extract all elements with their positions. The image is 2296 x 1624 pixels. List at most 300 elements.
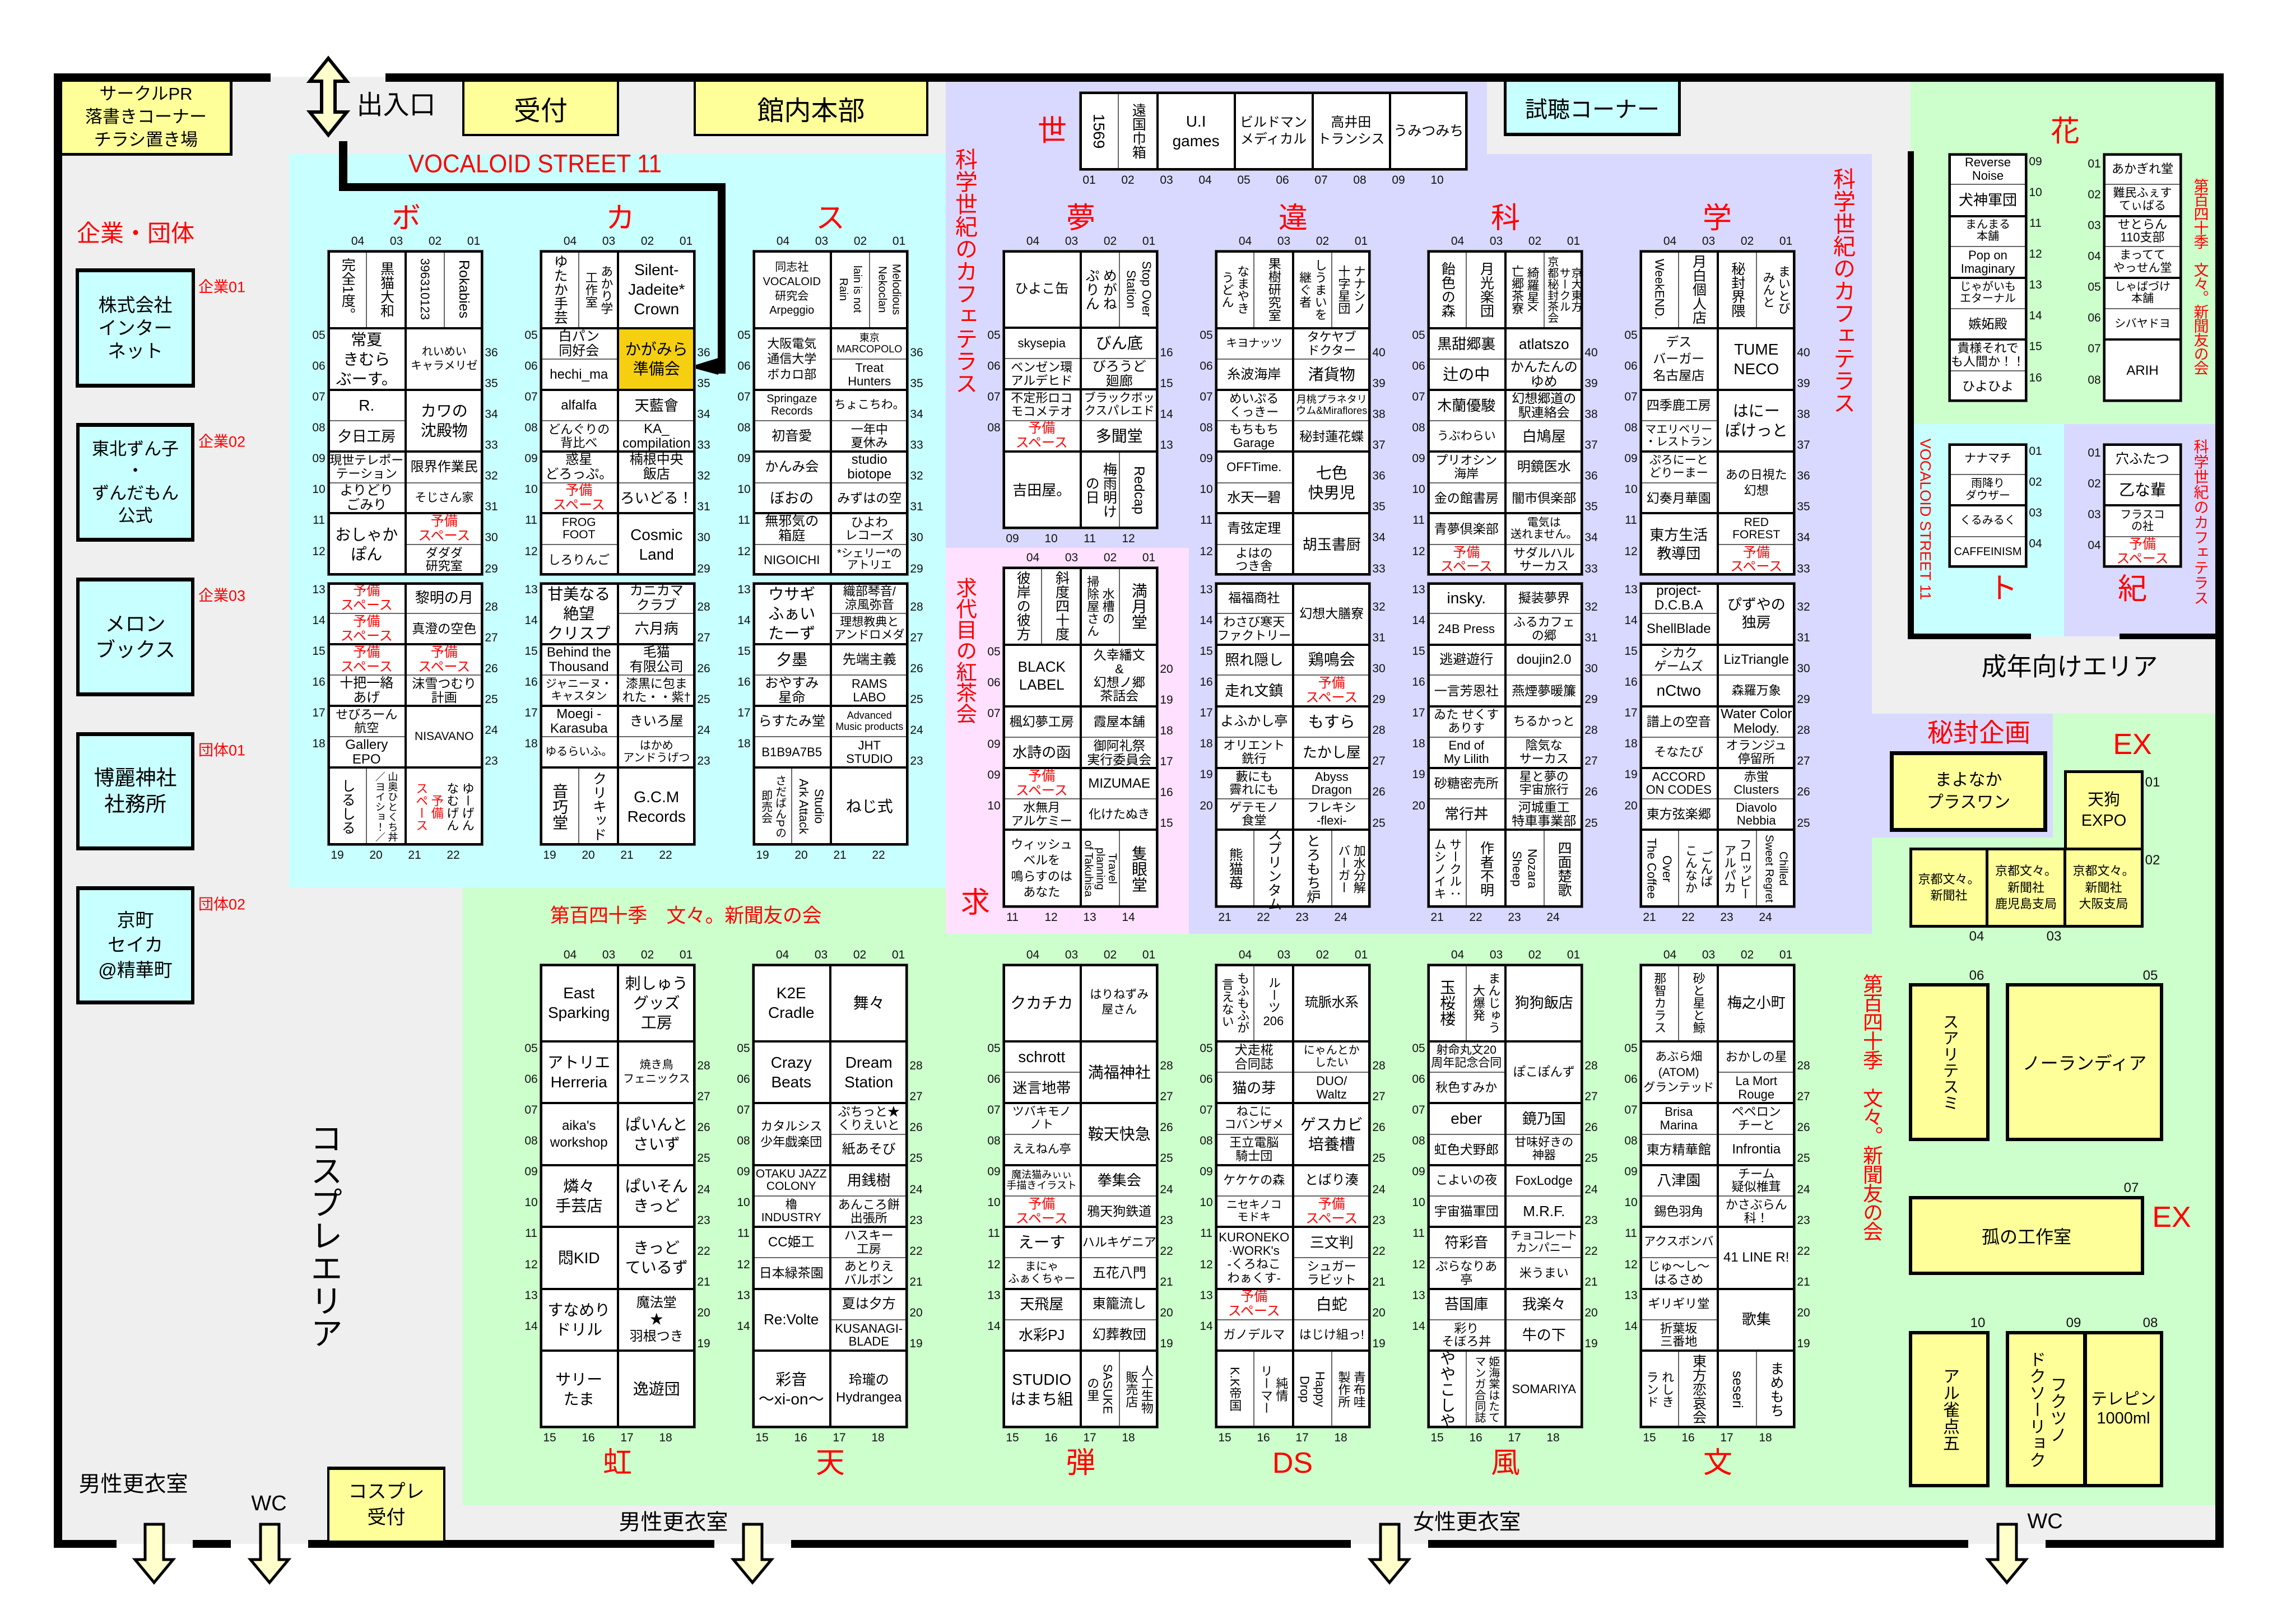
seat numbers: 15: [1643, 1431, 1656, 1444]
booth block: ボ lower: [328, 583, 483, 845]
booth block: 科 upper: サダルハル: [1513, 546, 1575, 560]
booth block: カ upper: しろりんご: [548, 553, 610, 567]
seat numbers: 26: [1797, 785, 1810, 798]
booth block: ス upper: 無邪気の: [765, 514, 819, 529]
booth block: 風: 苔国庫: [1444, 1296, 1488, 1313]
booth block: 夢: 梅雨明け: [1101, 462, 1117, 518]
booth block: 夢: の日: [1084, 476, 1099, 504]
seat numbers: 15: [2029, 340, 2042, 353]
booth block: カ lower: ジャニーヌ・: [546, 678, 612, 690]
booth block: 風: 彩り: [1454, 1321, 1479, 1336]
booth block: ス lower: 星命: [778, 690, 805, 705]
booth block: 文: じゅ〜し〜: [1648, 1259, 1709, 1273]
booth block: 夢: 不定形ロコ: [1011, 391, 1072, 405]
booth block: カ lower: クリキッド: [591, 771, 606, 841]
booth block: 夢: [1003, 250, 1158, 529]
seat numbers: 10: [524, 483, 538, 496]
seat numbers: [1197, 946, 1388, 1446]
booth block: ボ lower: 航空: [354, 720, 379, 735]
booth block: 科 upper: 電気は: [1527, 516, 1561, 529]
seat numbers: 03: [602, 235, 615, 248]
booth block: 求: 予備: [1028, 769, 1055, 784]
seat numbers: 31: [485, 500, 498, 513]
booth block: ス upper: [753, 250, 908, 575]
booth: 鹿児島支局: 鹿児島支局: [1995, 897, 2057, 911]
seat numbers: 38: [1797, 408, 1810, 421]
seat numbers: 22: [909, 1245, 923, 1258]
seat numbers: 02: [429, 235, 441, 248]
booth block: 天: [752, 964, 908, 1428]
seat numbers: 09: [1624, 452, 1638, 465]
seat numbers: 17: [1295, 1431, 1309, 1444]
booth block: ト: くるみるく: [1960, 514, 2016, 527]
seat numbers: 35: [697, 377, 710, 390]
EX booth numbers: 10: [1970, 1315, 1985, 1330]
seat numbers: 06: [987, 1073, 1001, 1086]
seat numbers: 19: [1584, 1337, 1598, 1350]
seat numbers: 03: [1702, 948, 1715, 961]
seat numbers: 16: [1624, 676, 1638, 688]
seat numbers: 03: [602, 948, 615, 961]
seat numbers: 27: [1584, 755, 1598, 767]
booth block: 文: Rouge: [1738, 1087, 1774, 1101]
zone heading: 科学世紀のカフェテラス small: 科学世紀のカフェテラス: [2192, 439, 2209, 605]
seat numbers: 06: [1412, 1073, 1425, 1086]
booth block: 科 upper: 京大東方: [1569, 267, 1582, 311]
booth block: 弾: ハルキゲニア: [1082, 1235, 1156, 1249]
booth block: 夢: skysepia: [1017, 336, 1066, 350]
booth block: 違 lower: 藪にも: [1235, 770, 1272, 784]
seat numbers: 06: [1412, 360, 1425, 373]
booth block: ボ upper: れいめい: [422, 346, 467, 358]
booth block: 違 upper: 秘封蓮花蝶: [1299, 429, 1364, 444]
booth block: カ lower: きいろ屋: [630, 714, 684, 729]
booth block: 学 lower: そなたび: [1654, 745, 1703, 759]
booth block: 風: カンパニー: [1516, 1242, 1572, 1254]
seat numbers: 14: [1160, 408, 1173, 421]
booth: 大阪支局: 京都文々。: [2072, 864, 2135, 878]
booth block: カ lower: 有限公司: [630, 659, 684, 674]
booth block: 天: バルボン: [844, 1273, 894, 1287]
seat numbers: 11: [1625, 514, 1637, 527]
booth block: 花 left: Noise: [1972, 169, 2004, 183]
seat numbers: 07: [1412, 1104, 1425, 1116]
booth: フクツノドクソーリョク: フクツノ: [2047, 1376, 2066, 1443]
seat numbers: 01: [467, 235, 480, 248]
booth block: 夢: ひよこ缶: [1015, 281, 1068, 296]
seat numbers: 30: [1797, 662, 1810, 675]
seat numbers: 17: [1160, 755, 1173, 768]
seat numbers: 20: [1584, 1306, 1598, 1319]
booth block: 科 upper: かんたんの: [1510, 360, 1578, 375]
seat numbers: 20: [369, 849, 383, 862]
seat numbers: 07: [2088, 342, 2101, 355]
seat numbers: 05: [1237, 174, 1251, 187]
booth block: DS: ニセキノコ: [1226, 1199, 1282, 1211]
seat numbers: 11: [525, 1227, 537, 1240]
seat numbers: 01: [893, 235, 905, 248]
booth block: 学 lower: フロッピー: [1738, 838, 1752, 900]
booth block: 学 upper: まいとび: [1777, 264, 1791, 314]
seat numbers: 12: [1044, 911, 1058, 924]
seat numbers: 11: [313, 514, 325, 527]
booth block: 天: 工房: [857, 1242, 881, 1256]
booth block: DS: はじけ組っ!: [1299, 1328, 1364, 1342]
booth block: 学 upper: 予備: [1743, 545, 1770, 560]
booth block: ス upper: 東京: [859, 332, 880, 343]
booth block: 学 upper: 四季鹿工房: [1647, 398, 1711, 412]
seat numbers: 10: [1044, 532, 1058, 545]
panel: 京町セイカ: セイカ: [108, 934, 163, 955]
seat numbers: 27: [1584, 1090, 1598, 1103]
booth block: ボ lower: しるしる: [340, 779, 355, 835]
booth block: DS: DUO/: [1316, 1074, 1347, 1088]
seat numbers: 28: [697, 1059, 710, 1072]
seat numbers: 07: [312, 390, 326, 403]
booth block: カ lower: カニカマ: [630, 583, 684, 598]
booth block: DS: [1215, 964, 1370, 1428]
booth block: ボ upper: ぽん: [351, 546, 382, 563]
booth block: 紀: 予備: [2129, 537, 2156, 552]
row label: DS: DS: [1272, 1447, 1313, 1479]
booth block: 夢: Stop Over: [1140, 261, 1154, 317]
seat numbers: 20: [1372, 1306, 1386, 1319]
booth block: 花 right: せとらん: [2118, 217, 2167, 231]
booth: ノーランディア: [2006, 983, 2163, 1141]
seat numbers: 08: [1624, 1134, 1638, 1147]
booth block: 世: [1080, 92, 1467, 170]
booth block: 学 upper: ・レストラン: [1645, 436, 1712, 448]
zone heading: 文々。新聞友の会 top right: 第百四十季 文々。新聞友の会: [2192, 178, 2209, 374]
EX booth numbers: 01: [2145, 775, 2160, 790]
seat numbers: 10: [2029, 186, 2042, 199]
seat numbers: 04: [2029, 537, 2042, 550]
booth block: 科 lower: 砂糖密売所: [1434, 776, 1499, 790]
booth block: 花 right: てぃばる: [2119, 199, 2166, 212]
booth block: 違 lower: 加水分解: [1352, 844, 1366, 893]
booth block: 紀: スペース: [2116, 551, 2169, 566]
heading: VOCALOID STREET 11: VOCALOID STREET 11: [408, 149, 662, 178]
seat numbers: 03: [2029, 506, 2042, 519]
booth block: カ upper: alfalfa: [561, 398, 597, 413]
seat numbers: 09: [987, 1165, 1001, 1178]
booth block: 学 lower: Chilled: [1777, 851, 1789, 886]
seat numbers: 22: [1681, 911, 1695, 924]
booth block: 求: ベルを: [1023, 853, 1060, 867]
booth block: 風: M.R.F.: [1523, 1203, 1565, 1220]
seat numbers: 01: [1355, 235, 1368, 248]
booth block: ボ lower: Gallery: [345, 737, 388, 752]
booth block: ス upper: 一年中: [851, 422, 888, 436]
seat numbers: 14: [1412, 1320, 1425, 1333]
booth block: 学 upper: はにー: [1733, 402, 1780, 420]
booth block: 科 lower: 常行丼: [1444, 806, 1488, 822]
seat numbers: [737, 583, 923, 862]
seat numbers: 10: [1200, 483, 1213, 496]
seat numbers: 08: [987, 1134, 1001, 1147]
seat numbers: 22: [447, 849, 460, 862]
booth block: DS: モドキ: [1237, 1211, 1271, 1223]
EX booth numbers: 09: [2066, 1315, 2081, 1330]
booth block: 学 lower: 森羅万象: [1732, 683, 1781, 697]
seat numbers: 33: [910, 439, 923, 452]
booth block: 学 upper: 月白個人店: [1691, 254, 1707, 324]
booth block: 科 upper: 予備: [1453, 545, 1480, 560]
booth block: 虹: Sparking: [548, 1004, 610, 1021]
booth block: 学 upper: ぽけっと: [1725, 422, 1788, 439]
label: 団体01: 団体01: [198, 742, 245, 759]
booth block: ボ upper: 完全1度。: [340, 258, 355, 321]
seat numbers: 13: [2029, 278, 2042, 291]
booth block: 世: トランシス: [1317, 132, 1384, 147]
booth block: ス upper: 同志社: [775, 261, 808, 273]
seat numbers: [2085, 426, 2200, 585]
booth block: ス lower: おやすみ: [765, 676, 819, 691]
booth: スアリテスミ: スアリテスミ: [1940, 1013, 1958, 1111]
booth block: 天: Dream: [845, 1054, 893, 1071]
booth block: DS: 犬走椛: [1235, 1043, 1274, 1057]
seat numbers: 11: [1412, 514, 1425, 527]
seat numbers: 06: [1624, 360, 1638, 373]
seat numbers: [524, 235, 710, 575]
booth block: ボ upper: 予備: [431, 514, 458, 529]
seat numbers: 21: [909, 1276, 923, 1288]
booth block: 虹: ドリル: [555, 1321, 602, 1338]
booth block: 求: LABEL: [1019, 676, 1065, 693]
booth block: DS: スペース: [1305, 1211, 1358, 1226]
booth block: カ upper: hechi_ma: [550, 367, 608, 382]
booth block: 風: 虹色犬野郎: [1434, 1142, 1499, 1157]
booth block: 虹: サリー: [555, 1371, 602, 1388]
booth block: DS: 白蛇: [1316, 1296, 1347, 1313]
booth block: ス lower: JHT: [858, 738, 881, 752]
booth block: 文: グランテッド: [1643, 1081, 1714, 1094]
booth block: 天: 櫓: [786, 1198, 797, 1211]
seat numbers: 31: [1797, 631, 1810, 644]
booth block: 文: かさぶらん: [1726, 1198, 1787, 1212]
booth: 孤の工作室: [1909, 1196, 2144, 1275]
booth block: 弾: 天飛屋: [1020, 1296, 1063, 1313]
booth block: 違 lower: 食堂: [1242, 813, 1266, 827]
seat numbers: 08: [1412, 1134, 1425, 1147]
seat numbers: 04: [564, 948, 577, 961]
booth block: 学 lower: Over: [1660, 855, 1674, 882]
booth: 大阪支局: 大阪支局: [2079, 897, 2128, 911]
seat numbers: 26: [1160, 1121, 1173, 1134]
seat numbers: 17: [1083, 1431, 1096, 1444]
seat numbers: 10: [312, 483, 326, 496]
booth block: DS: ゲスカビ: [1300, 1116, 1363, 1133]
seat numbers: 24: [1160, 1183, 1173, 1196]
seat numbers: 35: [485, 377, 498, 390]
booth block: 天: INDUSTRY: [761, 1211, 821, 1224]
booth block: ボ lower: せびろーん: [336, 708, 397, 722]
seat numbers: 20: [1200, 799, 1213, 812]
booth block: 科 upper: 駅連絡会: [1518, 405, 1570, 420]
booth block: 科 upper: 綺羅星X: [1526, 267, 1540, 312]
booth block: ボ upper: よりどり: [340, 483, 393, 498]
seat numbers: 12: [1624, 545, 1638, 558]
booth block: 科 lower: の郷: [1532, 629, 1556, 643]
booth block: 学 upper: スペース: [1730, 559, 1782, 574]
seat numbers: 31: [697, 500, 710, 513]
booth block: 科 upper: 辻の中: [1443, 366, 1490, 383]
booth: 天狗EXPO: 天狗: [2088, 791, 2120, 809]
seat numbers: 05: [524, 328, 538, 342]
seat numbers: 15: [1200, 645, 1213, 658]
booth block: ボ lower: 予備: [430, 794, 444, 819]
booth block: ス upper: Nekoclan: [876, 266, 888, 313]
booth block: DS: 予備: [1318, 1197, 1345, 1212]
booth block: カ upper: [540, 250, 695, 575]
seat numbers: 11: [1006, 911, 1019, 924]
booth: 鹿児島支局: [1986, 848, 2066, 928]
booth block: 学 upper: 秘封界隈: [1730, 261, 1745, 317]
booth block: 科 lower: 宇宙旅行: [1519, 783, 1569, 797]
booth block: DS: ガノデルマ: [1223, 1328, 1285, 1342]
label: 団体02: 団体02: [198, 896, 245, 913]
seat numbers: 35: [1584, 500, 1598, 513]
seat numbers: 25: [1797, 817, 1810, 830]
booth block: 違 upper: 継ぐ者: [1298, 271, 1312, 308]
seat numbers: 21: [1160, 1276, 1173, 1288]
booth block: 虹: きっど: [633, 1239, 680, 1257]
seat numbers: 18: [871, 1431, 885, 1444]
booth block: 求: &: [1115, 662, 1123, 676]
booth block: カ upper: 楠根中央: [630, 452, 684, 467]
booth block: 虹: フェニックス: [623, 1073, 690, 1085]
EX booth numbers: 08: [2143, 1315, 2158, 1330]
seat numbers: 23: [1372, 1214, 1386, 1227]
zone heading: 文々。新聞友の会 lower right: 第百四十季 文々。新聞友の会: [1860, 974, 1883, 1240]
booth block: 違 lower: スペース: [1305, 690, 1358, 705]
booth block: 学 lower: 東方弦楽郷: [1647, 807, 1711, 821]
seat numbers: 21: [1372, 1276, 1386, 1288]
seat numbers: 36: [910, 346, 923, 359]
booth block: ボ lower: 沫雪つむり: [412, 676, 476, 691]
booth block: 虹: すなめり: [547, 1301, 610, 1319]
seat numbers: 04: [1198, 174, 1212, 187]
seat numbers: 02: [641, 235, 654, 248]
booth block: 虹: 刺しゅう: [625, 975, 688, 992]
booth block: ス lower: らすたみ堂: [758, 714, 825, 729]
seat numbers: 25: [909, 1152, 923, 1165]
seat numbers: 21: [1218, 911, 1231, 924]
seat numbers: 11: [1200, 514, 1212, 527]
box: 受付: 受付: [514, 96, 568, 125]
seat numbers: 01: [1779, 235, 1792, 248]
row label: 花: 花: [2051, 115, 2080, 148]
zone: 科学世紀のカフェテラス: [946, 82, 2216, 934]
seat numbers: 38: [1372, 408, 1386, 421]
booth block: 学 lower: ぴずやの: [1727, 596, 1786, 613]
seat numbers: 07: [1624, 390, 1638, 403]
seat numbers: 18: [659, 1431, 672, 1444]
seat numbers: 13: [987, 1289, 1001, 1302]
booth block: 風: SOMARIYA: [1512, 1382, 1576, 1396]
booth block: 求: 水詩の函: [1012, 744, 1071, 761]
booth block: カ lower: Karasuba: [550, 720, 608, 736]
booth block: 学 upper: みんと: [1761, 271, 1775, 308]
booth: 鹿児島支局: 新聞社: [2007, 881, 2044, 895]
seat numbers: 25: [1372, 817, 1386, 830]
booth block: 学 lower: こんなか: [1684, 844, 1698, 893]
booth block: 違 lower: たかし屋: [1303, 744, 1361, 761]
booth block: 夢: めがね: [1101, 268, 1117, 310]
booth block: カ upper: 予備: [565, 483, 592, 498]
box: サークルPR: チラシ置き場: [94, 130, 198, 150]
seat numbers: [312, 235, 498, 575]
booth block: 学 lower: ごんば: [1699, 850, 1713, 887]
booth block: ト: 雨降り: [1971, 477, 2005, 490]
booth block: 違 upper: よはの: [1235, 546, 1272, 560]
seat numbers: 13: [1412, 1289, 1425, 1302]
booth block: 科 upper: 幻想郷道の: [1512, 391, 1576, 406]
booth block: 弾: 魔法猫みぃぃ: [1011, 1169, 1072, 1180]
seat numbers: 09: [1200, 1165, 1213, 1178]
seat numbers: 04: [1026, 551, 1039, 564]
seat numbers: 01: [1142, 235, 1155, 248]
booth block: DS: ケケケの森: [1223, 1173, 1285, 1187]
booth block: 風: 亭: [1460, 1273, 1472, 1287]
booth block: 弾: えーす: [1018, 1234, 1065, 1251]
seat numbers: 30: [1372, 662, 1386, 675]
row label: ス: ス: [816, 202, 845, 235]
panel: 株式会社インターネット: [76, 268, 195, 388]
booth: スアリテスミ: [1909, 983, 1990, 1141]
seat numbers: 13: [1624, 583, 1638, 596]
seat numbers: 35: [1797, 500, 1810, 513]
booth block: 虹: アトリエ: [547, 1054, 610, 1071]
heading: 秘封企画: 秘封企画: [1927, 718, 2030, 747]
booth block: 求: 掃除屋さん: [1085, 575, 1099, 636]
seat numbers: 12: [1412, 545, 1425, 558]
booth block: 学 lower: The Coffee: [1645, 838, 1659, 899]
booth block: 違 upper: 月桃プラネタリ: [1296, 394, 1367, 405]
seat numbers: 15: [1006, 1431, 1019, 1444]
seat numbers: 07: [1314, 174, 1328, 187]
seat numbers: 07: [524, 390, 538, 403]
booth block: 違 lower: Abyss: [1315, 770, 1349, 784]
seat numbers: 18: [737, 737, 751, 750]
seat numbers: 12: [1412, 1258, 1425, 1271]
booth block: 学 upper: 幻奏月華園: [1647, 491, 1711, 505]
seat numbers: 06: [524, 1073, 538, 1086]
seat numbers: [312, 583, 498, 862]
seat numbers: 18: [524, 737, 538, 750]
booth block: 天: 少年戯楽団: [760, 1135, 822, 1149]
seat numbers: 11: [1412, 1227, 1425, 1240]
booth block: 花 right: まってて: [2120, 249, 2165, 262]
booth block: 科 upper: 京都秘封茶会: [1546, 255, 1558, 323]
booth block: 求: あなた: [1023, 885, 1060, 899]
seat numbers: 14: [737, 1320, 750, 1333]
seat numbers: 15: [1624, 645, 1638, 658]
seat numbers: 16: [2029, 371, 2042, 384]
seat numbers: 19: [1200, 768, 1213, 781]
seat numbers: 24: [1372, 1183, 1386, 1196]
booth block: 違 upper: 快男児: [1308, 484, 1355, 501]
booth block: 文: チーと: [1738, 1118, 1775, 1132]
booth block: 学 upper: RED: [1744, 516, 1769, 529]
booth block: 科 lower: End of: [1448, 738, 1484, 752]
label: 出入口: 出入口: [356, 90, 436, 120]
booth block: カ lower: クラブ: [636, 597, 677, 613]
seat numbers: 34: [910, 408, 923, 421]
booth block: ス upper: レコーズ: [845, 528, 894, 542]
seat numbers: 26: [909, 1121, 923, 1134]
booth block: 虹: [540, 964, 695, 1428]
